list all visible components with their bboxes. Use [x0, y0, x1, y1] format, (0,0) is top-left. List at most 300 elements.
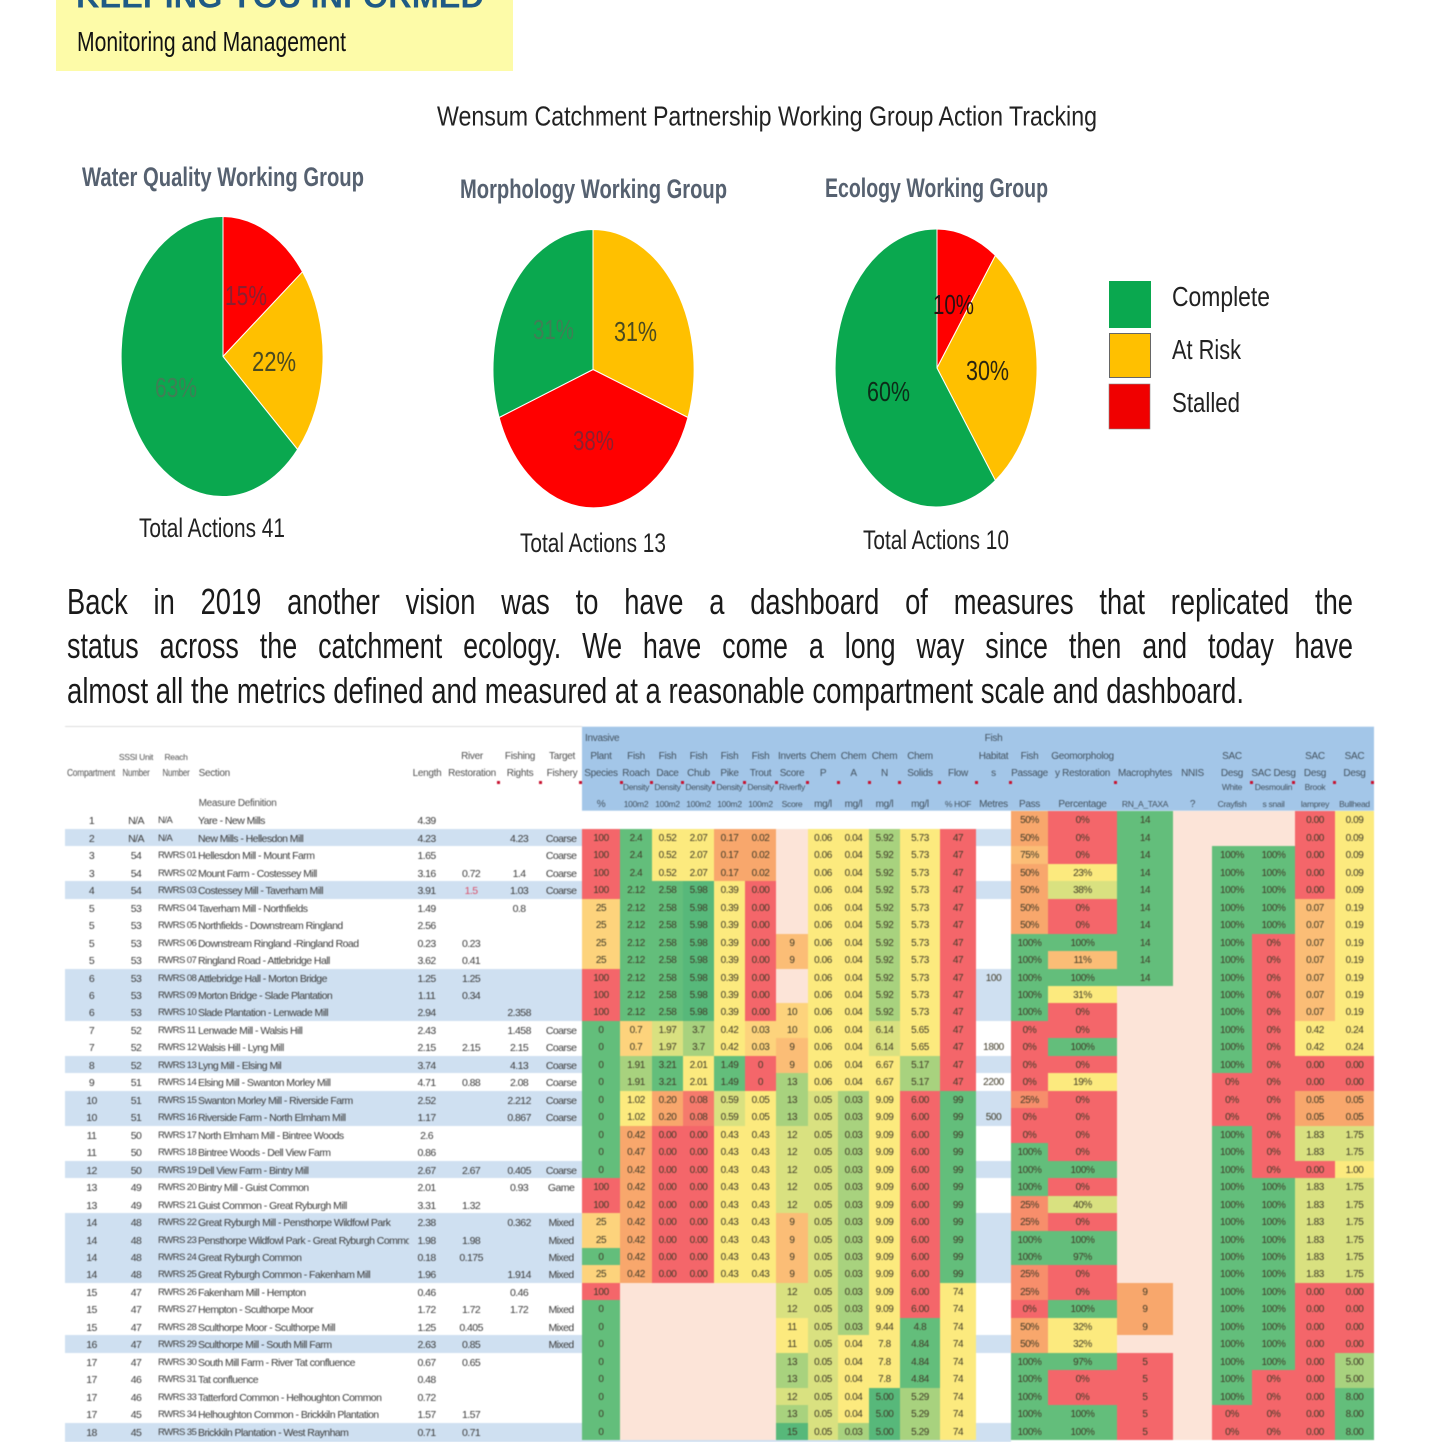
header: reach columns: Section [199, 768, 230, 779]
table: colour-coded heatmap: 0.05 [814, 1287, 832, 1298]
table: colour-coded heatmap: 0.05 [814, 1427, 832, 1438]
table: colour-coded heatmap: 0 [758, 1077, 763, 1088]
table: reach details: RWRS 34 [158, 1409, 196, 1420]
header: metric columns: ? [1190, 799, 1196, 810]
table: colour-coded heatmap: 50% [1020, 868, 1039, 879]
table: reach details: South Mill Farm - River Tat confluence [198, 1357, 355, 1369]
table: colour-coded heatmap: 0.03 [845, 1269, 862, 1280]
table: colour-coded heatmap: 0.43 [721, 1182, 738, 1193]
table: colour-coded heatmap: 0% [1267, 1392, 1280, 1403]
table: reach details: 1.57 [417, 1409, 436, 1421]
table: colour-coded heatmap: 0.39 [721, 955, 738, 966]
table: colour-coded heatmap: 5.98 [690, 920, 707, 931]
table: reach details: 3.16 [417, 868, 436, 880]
table: colour-coded heatmap: 74 [953, 1392, 963, 1403]
table: colour-coded heatmap: 1.83 [1306, 1130, 1324, 1141]
table: reach details: 46 [131, 1392, 141, 1404]
table: colour-coded heatmap: 0.00 [1306, 1409, 1324, 1420]
table: colour-coded heatmap: 0 [598, 1252, 604, 1263]
table: colour-coded heatmap: 100% [1262, 1200, 1285, 1211]
table: reach details: 2.358 [507, 1007, 531, 1019]
table: colour-coded heatmap: 74 [953, 1304, 963, 1315]
table: colour-coded heatmap: 9 [789, 938, 795, 949]
table: colour-coded heatmap: 0.04 [845, 1077, 862, 1088]
table: reach details: 0.71 [417, 1427, 436, 1439]
table: reach details: RWRS 27 [158, 1304, 196, 1315]
table: colour-coded heatmap: 5 [1142, 1392, 1148, 1403]
table: colour-coded heatmap: 0.05 [814, 1130, 832, 1141]
table: colour-coded heatmap: 5.92 [876, 938, 893, 949]
table: reach details: 1.25 [462, 973, 480, 985]
header: metric columns: Desg [1304, 768, 1326, 779]
table: reach details: 47 [131, 1322, 141, 1334]
table: colour-coded heatmap: 2.12 [627, 885, 645, 896]
header: metric columns: SAC [1305, 751, 1325, 762]
total actions: water quality: Total Actions 41 [139, 513, 285, 543]
table: colour-coded heatmap: 0.00 [1346, 1339, 1363, 1350]
table: colour-coded heatmap: 100% [1262, 868, 1285, 879]
table: colour-coded heatmap: 6.00 [911, 1217, 929, 1228]
table: colour-coded heatmap: 0.06 [814, 920, 832, 931]
table: colour-coded heatmap: 50% [1020, 920, 1039, 931]
header: metric columns: SAC [1345, 751, 1364, 762]
table: reach details: RWRS 33 [158, 1392, 196, 1403]
table: colour-coded heatmap: 2.07 [690, 850, 707, 861]
table: colour-coded heatmap: 0.04 [845, 955, 862, 966]
table: reach details: RWRS 13 [158, 1060, 196, 1071]
table: colour-coded heatmap: 100% [1018, 1374, 1041, 1385]
table: colour-coded heatmap: 100% [1262, 920, 1285, 931]
table: colour-coded heatmap: 100% [1220, 1339, 1244, 1350]
table: colour-coded heatmap: 6.00 [911, 1287, 929, 1298]
table: reach details: Fakenham Mill - Hempton [198, 1287, 306, 1299]
table: reach details: 46 [131, 1374, 141, 1386]
table: reach details: 2.67 [462, 1165, 480, 1177]
table: reach details: 1.32 [462, 1200, 480, 1212]
table: reach details: Yare - New Mills [198, 815, 265, 827]
table: colour-coded heatmap: 5 [1142, 1357, 1148, 1368]
table: reach details: 51 [131, 1095, 141, 1107]
table: colour-coded heatmap: 0.42 [627, 1130, 645, 1141]
table: colour-coded heatmap: 0.39 [721, 885, 738, 896]
table: colour-coded heatmap: 2.12 [627, 973, 645, 984]
table: colour-coded heatmap: 100% [1262, 903, 1285, 914]
table: colour-coded heatmap: 4.8 [914, 1322, 926, 1333]
table: reach details: Coarse [546, 1095, 576, 1107]
table: colour-coded heatmap: 0 [598, 1042, 604, 1053]
header: metric columns: Metres [979, 799, 1008, 810]
table: colour-coded heatmap: 100% [1220, 868, 1244, 879]
table: reach details: 0.46 [510, 1287, 528, 1299]
table: colour-coded heatmap: 6.00 [911, 1252, 929, 1263]
table: colour-coded heatmap: 100% [1262, 850, 1285, 861]
table: reach details: Lenwade Mill - Walsis Hill [198, 1025, 302, 1037]
table: colour-coded heatmap: 0.00 [690, 1200, 707, 1211]
table: colour-coded heatmap: 74 [953, 1427, 963, 1438]
table: reach details: 0.72 [462, 868, 480, 880]
table: colour-coded heatmap: 25 [596, 1269, 606, 1280]
table: colour-coded heatmap: 2.4 [630, 850, 642, 861]
table: colour-coded heatmap: 0.08 [690, 1112, 707, 1123]
header: metric columns: Geomorpholog [1051, 751, 1114, 762]
table: reach details: 53 [131, 1007, 141, 1019]
table: colour-coded heatmap: 0 [598, 1427, 604, 1438]
table: colour-coded heatmap: 1.49 [721, 1060, 738, 1071]
table: reach details: Coarse [546, 868, 576, 880]
header: metric columns: Inverts [778, 751, 806, 762]
table: colour-coded heatmap: 0.19 [1346, 903, 1363, 914]
table: colour-coded heatmap: 0.05 [814, 1112, 832, 1123]
table: colour-coded heatmap: 47 [953, 1077, 963, 1088]
table: colour-coded heatmap: 2.07 [690, 833, 707, 844]
table: colour-coded heatmap: 0 [598, 1077, 604, 1088]
table: colour-coded heatmap: 0 [598, 1374, 604, 1385]
table: colour-coded heatmap: 100 [986, 973, 1001, 984]
table: reach details: 1.98 [417, 1235, 436, 1247]
table: colour-coded heatmap: 0.00 [752, 938, 769, 949]
table: colour-coded heatmap: 0.06 [814, 850, 832, 861]
table: reach details: 10 [86, 1112, 97, 1124]
table: colour-coded heatmap: 0 [598, 1322, 604, 1333]
table: reach details: 18 [86, 1427, 97, 1439]
table: colour-coded heatmap: 5.00 [876, 1392, 893, 1403]
table: colour-coded heatmap: 9.09 [876, 1200, 893, 1211]
table: reach details: Sculthorpe Moor - Sculthorpe Mill [198, 1322, 335, 1334]
legend: At Risk [1172, 334, 1242, 365]
table: colour-coded heatmap: 5.98 [690, 938, 707, 949]
table: colour-coded heatmap: 9 [789, 1217, 795, 1228]
table: colour-coded heatmap: 10 [787, 1025, 797, 1036]
table: colour-coded heatmap: 100 [593, 885, 609, 896]
table: colour-coded heatmap: 0.05 [814, 1235, 832, 1246]
table: colour-coded heatmap: 0.00 [752, 955, 769, 966]
table: colour-coded heatmap: 1.75 [1346, 1200, 1363, 1211]
table: colour-coded heatmap: 14 [1140, 903, 1150, 914]
table: colour-coded heatmap: 0.47 [627, 1147, 645, 1158]
value labels: morphology [533, 314, 657, 456]
table: colour-coded heatmap: 1.83 [1306, 1182, 1324, 1193]
table: colour-coded heatmap: 0% [1076, 1392, 1089, 1403]
table: reach details: RWRS 30 [158, 1357, 196, 1368]
table: colour-coded heatmap: 40% [1073, 1200, 1092, 1211]
table: colour-coded heatmap: 0 [598, 1147, 604, 1158]
table: reach details: 4.39 [417, 815, 436, 827]
table: colour-coded heatmap: 5.98 [690, 973, 707, 984]
table: colour-coded heatmap: 1.83 [1306, 1252, 1324, 1263]
table: colour-coded heatmap: 0.04 [845, 1357, 862, 1368]
table: colour-coded heatmap: 1.75 [1346, 1147, 1363, 1158]
table: colour-coded heatmap: 99 [953, 1217, 963, 1228]
table: colour-coded heatmap: 5.92 [876, 955, 893, 966]
table: colour-coded heatmap: 100% [1220, 1007, 1244, 1018]
table: reach details: Walsis Hill - Lyng Mill [198, 1042, 284, 1054]
table: colour-coded heatmap: 0.02 [752, 868, 769, 879]
table: colour-coded heatmap: 100% [1018, 938, 1041, 949]
table: colour-coded heatmap: 47 [953, 1007, 963, 1018]
table: colour-coded heatmap: 0% [1023, 1077, 1036, 1088]
table: colour-coded heatmap: 2.4 [630, 833, 642, 844]
table: colour-coded heatmap: 47 [953, 868, 963, 879]
table: reach details: 13 [86, 1200, 97, 1212]
table: reach details: RWRS 17 [158, 1130, 196, 1141]
table: colour-coded heatmap: 75% [1020, 850, 1039, 861]
table: colour-coded heatmap: 12 [787, 1304, 797, 1315]
header: metric columns: Desg [1221, 768, 1243, 779]
table: colour-coded heatmap: 2.58 [659, 955, 676, 966]
header: metric columns: mg/l [814, 799, 832, 810]
table: reach details: Coarse [546, 1042, 576, 1054]
table: colour-coded heatmap: 100% [1220, 1322, 1244, 1333]
table: colour-coded heatmap: 0.03 [845, 1235, 862, 1246]
table: colour-coded heatmap: 74 [953, 1409, 963, 1420]
table: reach details: 48 [131, 1217, 141, 1229]
table: colour-coded heatmap: 2.12 [627, 920, 645, 931]
table: reach details: 4.13 [510, 1060, 528, 1072]
table: colour-coded heatmap: 9.09 [876, 1287, 893, 1298]
table: colour-coded heatmap: 0 [598, 1339, 604, 1350]
table: colour-coded heatmap: 5.29 [911, 1392, 929, 1403]
table: reach details: 5 [89, 955, 94, 967]
table: reach details: 11 [87, 1147, 96, 1159]
table: colour-coded heatmap: 0 [598, 1392, 604, 1403]
table: colour-coded heatmap: 5.92 [876, 850, 893, 861]
table: colour-coded heatmap: 0.19 [1346, 920, 1363, 931]
table: colour-coded heatmap: 0.03 [845, 1182, 862, 1193]
table: reach details: N/A [158, 815, 172, 826]
table: colour-coded heatmap: 6.00 [911, 1130, 929, 1141]
table: colour-coded heatmap: 74 [953, 1374, 963, 1385]
table: colour-coded heatmap: 5.29 [911, 1427, 929, 1438]
table: colour-coded heatmap: 74 [953, 1339, 963, 1350]
table: colour-coded heatmap: 100 [593, 1200, 609, 1211]
table: colour-coded heatmap: 0% [1023, 1025, 1036, 1036]
table: colour-coded heatmap: 25 [596, 1235, 606, 1246]
table: colour-coded heatmap: 100% [1070, 1304, 1094, 1315]
header: reach columns: Target [549, 751, 576, 762]
table: colour-coded heatmap: 0% [1267, 973, 1280, 984]
table: reach details: 16 [86, 1339, 97, 1351]
table: colour-coded heatmap: 100% [1070, 1165, 1094, 1176]
table: colour-coded heatmap: 4.84 [911, 1357, 929, 1368]
table: colour-coded heatmap: 5.17 [911, 1060, 929, 1071]
table: reach details: 0.71 [462, 1427, 480, 1439]
table: reach details [86, 815, 578, 1439]
table: reach details: 1.11 [418, 990, 435, 1002]
table: colour-coded heatmap: 0.42 [721, 1025, 738, 1036]
table: colour-coded heatmap: 0 [598, 1095, 604, 1106]
table: reach details: 5 [89, 903, 94, 915]
header: metric columns: Habitat [979, 751, 1009, 762]
table: colour-coded heatmap: 0.00 [752, 903, 769, 914]
table: reach details: Coarse [546, 1025, 576, 1037]
table: colour-coded heatmap: 0.00 [1306, 1165, 1324, 1176]
table: colour-coded heatmap: 1.83 [1306, 1147, 1324, 1158]
table: reach details: 0.34 [462, 990, 480, 1002]
table: colour-coded heatmap: 0% [1023, 1112, 1036, 1123]
table: colour-coded heatmap: 9.09 [876, 1095, 893, 1106]
table: reach details: Brickkiln Plantation - West Raynham [198, 1427, 348, 1439]
table: reach details: 5 [89, 920, 94, 932]
table: colour-coded heatmap: 100 [593, 850, 609, 861]
table: colour-coded heatmap: 0.05 [1346, 1095, 1363, 1106]
header: metric columns: White [1222, 782, 1243, 792]
table: colour-coded heatmap: 2.07 [690, 868, 707, 879]
header: metric columns: Invasive [585, 733, 620, 744]
table: colour-coded heatmap: 0% [1267, 1007, 1280, 1018]
table: colour-coded heatmap: 0.43 [752, 1217, 769, 1228]
table: colour-coded heatmap: 5.92 [876, 1007, 893, 1018]
table: colour-coded heatmap: 100% [1220, 1025, 1244, 1036]
table: colour-coded heatmap: 100% [1018, 1427, 1041, 1438]
table: reach details: 2.15 [417, 1042, 436, 1054]
table: colour-coded heatmap: 0.00 [690, 1217, 707, 1228]
header: metric columns: Fish [627, 751, 645, 762]
table: colour-coded heatmap: 0.05 [814, 1269, 832, 1280]
table: colour-coded heatmap: 0.06 [814, 1060, 832, 1071]
table: colour-coded heatmap: 100% [1262, 1339, 1285, 1350]
table: colour-coded heatmap: 0.03 [845, 1165, 862, 1176]
legend: Complete [1172, 281, 1270, 312]
table: reach details: 7 [89, 1025, 94, 1037]
total actions: ecology: Total Actions 10 [863, 525, 1009, 555]
table: colour-coded heatmap: 0.03 [845, 1147, 862, 1158]
table: reach details: RWRS 22 [158, 1217, 196, 1228]
table: colour-coded heatmap: 100% [1018, 955, 1041, 966]
table: reach details: RWRS 28 [158, 1322, 196, 1333]
table: colour-coded heatmap: 0.42 [627, 1252, 645, 1263]
table: colour-coded heatmap: 0.42 [1306, 1042, 1324, 1053]
table: colour-coded heatmap: 0.00 [659, 1130, 676, 1141]
table: colour-coded heatmap: 3.7 [692, 1025, 705, 1036]
pie chart: ecology [835, 229, 1037, 507]
table: colour-coded heatmap: 2.12 [627, 903, 645, 914]
table: colour-coded heatmap: 0.00 [659, 1165, 676, 1176]
table: colour-coded heatmap: 0.03 [845, 1130, 862, 1141]
table: reach details: 1.72 [417, 1304, 436, 1316]
table: reach details: Mixed [548, 1235, 574, 1247]
table: colour-coded heatmap: 0% [1267, 1060, 1280, 1071]
table: colour-coded heatmap: 0.24 [1346, 1025, 1363, 1036]
header: metric columns: RN_A_TAXA [1122, 799, 1169, 809]
table: reach details: 1.65 [417, 850, 436, 862]
table: colour-coded heatmap: 0.43 [752, 1165, 769, 1176]
table: colour-coded heatmap: 100% [1220, 1042, 1244, 1053]
table: colour-coded heatmap: 47 [953, 990, 963, 1001]
table: reach details: Coarse [546, 1165, 576, 1177]
table: reach details: Attlebridge Hall - Morton Bridge [198, 973, 327, 985]
table: reach details: 1.5 [465, 885, 478, 897]
table: colour-coded heatmap: 15 [787, 1427, 797, 1438]
table: reach details: N/A [158, 833, 172, 844]
table: colour-coded heatmap: 23% [1073, 868, 1092, 879]
table: colour-coded heatmap: 0% [1076, 1112, 1089, 1123]
table: reach details: 1.4 [513, 868, 526, 880]
table: colour-coded heatmap: 99 [953, 1147, 963, 1158]
table: reach details: RWRS 06 [158, 938, 196, 949]
table: colour-coded heatmap: 0.00 [659, 1235, 676, 1246]
header: metric columns: Percentage [1058, 799, 1107, 810]
table: colour-coded heatmap: 1.91 [627, 1060, 645, 1071]
table: colour-coded heatmap: 0% [1076, 1130, 1089, 1141]
table: colour-coded heatmap: 0.00 [1306, 1077, 1324, 1088]
table: colour-coded heatmap: 0% [1076, 903, 1089, 914]
table: reach details: 0.72 [417, 1392, 436, 1404]
table: colour-coded heatmap: 0% [1267, 1427, 1280, 1438]
table: colour-coded heatmap: 5.73 [911, 903, 929, 914]
table: colour-coded heatmap: 47 [953, 1060, 963, 1071]
table: colour-coded heatmap: 0% [1267, 1409, 1280, 1420]
table: colour-coded heatmap: 2.12 [627, 1007, 645, 1018]
header: metric columns: Fish [1021, 751, 1038, 762]
table: reach details: Coarse [546, 1077, 576, 1089]
table: colour-coded heatmap: 25% [1020, 1200, 1039, 1211]
table: colour-coded heatmap: 0.20 [659, 1095, 676, 1106]
table: colour-coded heatmap: 100% [1220, 1374, 1244, 1385]
table: colour-coded heatmap: 0% [1267, 1130, 1280, 1141]
table: colour-coded heatmap: 25 [596, 920, 606, 931]
table: reach details: 1.49 [417, 903, 436, 915]
table: reach details: RWRS 09 [158, 990, 196, 1001]
table: reach details: 6 [89, 1007, 94, 1019]
header: metric columns: Riverfly [779, 782, 806, 792]
table: reach details: 50 [131, 1165, 141, 1177]
table: reach details: 2.212 [507, 1095, 531, 1107]
table: colour-coded heatmap: 0.03 [845, 1095, 862, 1106]
table: colour-coded heatmap: 0.04 [845, 1060, 862, 1071]
table: colour-coded heatmap: 100% [1262, 1182, 1285, 1193]
table: colour-coded heatmap: 9.09 [876, 1235, 893, 1246]
table: reach details: 53 [131, 938, 141, 950]
table: colour-coded heatmap: 0.00 [1346, 1077, 1363, 1088]
table: colour-coded heatmap: 0% [1076, 1147, 1089, 1158]
table: colour-coded heatmap: 32% [1073, 1339, 1092, 1350]
table: colour-coded heatmap: 100% [1220, 1392, 1244, 1403]
table: reach details: Downstream Ringland -Ringland Road [198, 938, 358, 950]
table: colour-coded heatmap: 0% [1267, 1095, 1280, 1106]
table: colour-coded heatmap: 0% [1267, 1165, 1280, 1176]
table: colour-coded heatmap: 47 [953, 833, 963, 844]
table: colour-coded heatmap: 0.43 [752, 1130, 769, 1141]
table: colour-coded heatmap: 11 [787, 1322, 797, 1333]
table: colour-coded heatmap: 0.00 [752, 920, 769, 931]
table: reach details: 0.867 [507, 1112, 531, 1124]
table: colour-coded heatmap: 0.04 [845, 868, 862, 879]
table: reach details: 54 [131, 868, 141, 880]
value labels: morphology: 31% [533, 314, 574, 345]
header: reach columns: River [461, 751, 484, 762]
table: reach details: 10 [86, 1095, 97, 1107]
table: colour-coded heatmap: 1800 [983, 1042, 1004, 1053]
header: metric columns: mg/l [911, 799, 929, 810]
table: colour-coded heatmap: 100% [1220, 1252, 1244, 1263]
table: reach details: 53 [131, 990, 141, 1002]
table: colour-coded heatmap: 0.00 [1306, 1427, 1324, 1438]
table: reach details: 0.405 [459, 1322, 483, 1334]
header: metric columns: mg/l [845, 799, 862, 810]
table: colour-coded heatmap: 0.00 [690, 1147, 707, 1158]
table: colour-coded heatmap: 0 [598, 1165, 604, 1176]
table: colour-coded heatmap: 0.05 [814, 1357, 832, 1368]
table: colour-coded heatmap: 0% [1076, 1095, 1089, 1106]
table: colour-coded heatmap: 50% [1020, 833, 1039, 844]
table: reach details: 4.23 [510, 833, 528, 845]
header: metric columns: Density [654, 782, 682, 792]
table: colour-coded heatmap: 5.92 [876, 990, 893, 1001]
table: colour-coded heatmap: 0.05 [814, 1147, 832, 1158]
table: reach details: RWRS 15 [158, 1095, 196, 1106]
table: colour-coded heatmap: 0.06 [814, 885, 832, 896]
table: colour-coded heatmap: 0.05 [1306, 1112, 1324, 1123]
